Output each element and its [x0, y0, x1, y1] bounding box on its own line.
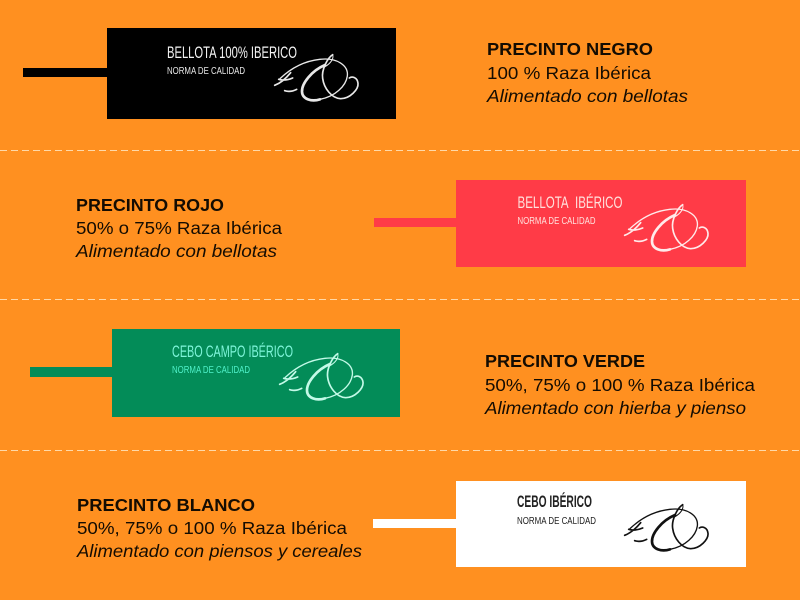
tag: precinto verde [30, 329, 400, 417]
text: precinto blanco: 50%, 75% o 100 % Raza Ibérica [77, 518, 347, 538]
tag: precinto rojo [374, 180, 746, 267]
tag: precinto blanco [373, 481, 746, 567]
text: precinto negro [486, 39, 688, 106]
tag label: bellota iberico: BELLOTA IBÉRICO [518, 193, 622, 212]
text: precinto negro: Alimentado con bellotas [486, 86, 688, 106]
text: precinto blanco: PRECINTO BLANCO [77, 495, 255, 515]
icon: signature logo [280, 354, 363, 399]
text: precinto negro: 100 % Raza Ibérica [487, 63, 651, 83]
text: precinto blanco [76, 495, 362, 561]
text: precinto rojo [75, 195, 282, 261]
text: precinto rojo: 50% o 75% Raza Ibérica [76, 218, 282, 238]
icon: signature logo [625, 205, 708, 250]
text: precinto rojo: Alimentado con bellotas [75, 241, 277, 261]
tag label: bellota 100% iberico: BELLOTA 100% IBERICO [167, 43, 297, 62]
text: precinto verde: Alimentado con hierba y pienso [484, 398, 746, 418]
text: precinto verde: PRECINTO VERDE [485, 351, 645, 371]
tag label: cebo iberico: CEBO IBÉRICO [517, 492, 592, 511]
text: precinto negro: PRECINTO NEGRO [487, 39, 653, 59]
tag label: norma de calidad: NORMA DE CALIDAD [167, 65, 245, 77]
icon: signature logo [275, 55, 358, 100]
icon: signature logo [625, 505, 708, 550]
tag: precinto negro [23, 28, 396, 119]
tag label: cebo campo iberico: CEBO CAMPO IBÉRICO [172, 342, 293, 361]
text: precinto verde: 50%, 75% o 100 % Raza Ibérica [485, 375, 755, 395]
text: precinto rojo: PRECINTO ROJO [76, 195, 224, 215]
tag label: norma de calidad: NORMA DE CALIDAD [518, 215, 596, 227]
tag label: norma de calidad: NORMA DE CALIDAD [172, 364, 250, 376]
text: precinto verde [484, 351, 755, 418]
tag label: norma de calidad: NORMA DE CALIDAD [517, 515, 596, 527]
text: precinto blanco: Alimentado con piensos y cereales [76, 541, 362, 561]
